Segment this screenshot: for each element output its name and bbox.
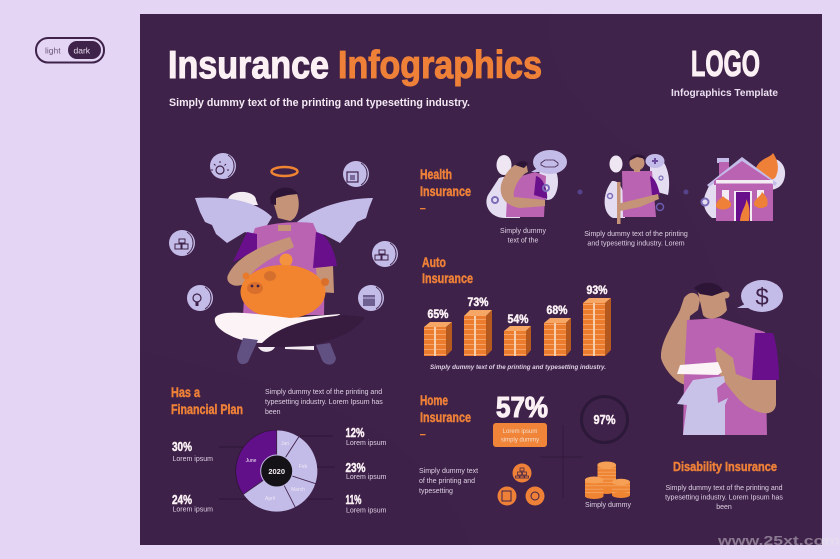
pie chart: June	[246, 458, 257, 464]
bar 65%	[424, 307, 452, 356]
stat 11%	[307, 493, 387, 514]
right sleeve	[313, 232, 337, 268]
caption 1: Simply dummy	[500, 228, 546, 235]
description: typesetting industry. Lorem Ipsum has	[265, 399, 383, 406]
light/dark toggle: light	[45, 46, 61, 56]
crossed white legs	[215, 313, 340, 343]
left sleeve	[233, 232, 257, 262]
title	[168, 44, 542, 87]
head	[694, 283, 730, 319]
stat 24%: 24%	[172, 493, 192, 507]
icon: coin	[526, 486, 544, 506]
pie chart: March	[291, 487, 305, 493]
pie chart: Feb	[299, 464, 308, 470]
figure 3: burning house	[702, 153, 785, 221]
heading: Insurance	[422, 271, 473, 286]
right arm	[316, 266, 334, 293]
stat 24%: Lorem ipsum	[172, 506, 213, 514]
connector dot	[684, 190, 688, 194]
heading: Health	[420, 167, 452, 182]
pie chart: 2020	[268, 467, 285, 476]
pie chart	[236, 430, 318, 512]
coin	[280, 254, 292, 266]
heading: Home	[420, 393, 448, 408]
caption 2	[584, 231, 688, 248]
bar 68%	[544, 303, 571, 356]
right foot	[316, 343, 336, 365]
piggy bank	[240, 265, 329, 319]
logo	[671, 43, 778, 99]
title: Infographics	[338, 44, 542, 87]
subtitle: Simply dummy text of the printing and typesetting industry.	[169, 97, 470, 109]
description: Simply dummy text of the printing and	[265, 389, 382, 396]
pie chart: Jan	[281, 441, 289, 447]
orange callout: Lorem ipsum	[503, 429, 537, 435]
shirt	[243, 222, 325, 315]
stat 12%: Lorem ipsum	[346, 440, 387, 447]
stat 24%	[172, 493, 247, 514]
stat 30%: Lorem ipsum	[172, 456, 213, 463]
bar 93%: 93%	[586, 283, 608, 297]
bar 65%: 65%	[428, 307, 449, 321]
heading: Has a	[171, 385, 200, 400]
ring stat 97%: 97%	[594, 412, 616, 427]
paper roll	[677, 362, 722, 375]
heading: Insurance	[420, 410, 471, 425]
logo: Infographics Template	[671, 87, 778, 99]
description: typesetting industry. Lorem Ipsum has	[665, 494, 783, 502]
bar 73%: 73%	[468, 295, 489, 309]
orbit icon: safe	[343, 161, 369, 187]
shirt	[683, 318, 767, 435]
figure 2	[605, 154, 669, 224]
sleeve	[752, 333, 779, 380]
description	[419, 468, 478, 495]
bar 54%	[504, 312, 531, 356]
left arm	[227, 237, 294, 286]
heading: Auto	[422, 255, 446, 270]
big stat 57%: 57%	[496, 392, 548, 424]
heading	[422, 255, 473, 286]
stat 11%: 11%	[346, 493, 362, 507]
bar 54%: 54%	[508, 312, 529, 326]
orbit icon: gold bars left	[169, 230, 195, 256]
orbit icon: calendar	[358, 285, 384, 311]
figure 1	[486, 150, 567, 218]
section: financial plan	[171, 385, 387, 514]
stat 12%	[300, 426, 387, 447]
title: Insurance	[168, 44, 329, 87]
left arm	[661, 293, 700, 385]
halo	[272, 167, 298, 176]
caption 1: text of the	[508, 238, 538, 244]
description: typesetting	[419, 488, 453, 495]
bar chart	[424, 283, 611, 356]
heading	[420, 393, 471, 435]
light/dark toggle: dark	[74, 46, 91, 56]
illustration: angel with piggy bank	[169, 153, 398, 365]
chart caption: Simply dummy text of the printing and typesetting industry.	[430, 364, 606, 371]
right arm	[715, 347, 776, 413]
description: Simply dummy text	[419, 468, 478, 475]
right wing	[297, 198, 373, 243]
description: of the printing and	[419, 478, 475, 485]
pie chart: April	[265, 496, 275, 502]
orange callout: simply dummy	[501, 438, 539, 444]
stat 23%: Lorem ipsum	[346, 474, 387, 481]
bar 73%	[464, 295, 492, 356]
light/dark toggle	[36, 38, 104, 62]
speech bubble: $	[755, 284, 769, 311]
bar 68%: 68%	[546, 303, 568, 317]
caption 2: Simply dummy text of the printing	[584, 231, 688, 238]
icon: safe	[498, 486, 516, 506]
dark leg	[262, 315, 365, 347]
icon: coin stacks	[585, 462, 630, 499]
orbit icon: gold bars right	[372, 241, 398, 267]
stat 23%: 23%	[346, 461, 366, 475]
watermark: www.25xt.com	[717, 533, 840, 548]
section: health insurance	[420, 150, 785, 248]
description	[665, 485, 783, 511]
speech bubble	[737, 280, 783, 312]
heading: Insurance	[420, 184, 471, 199]
stat 11%: Lorem ipsum	[346, 508, 387, 514]
section: auto insurance	[422, 255, 611, 371]
description: been	[716, 504, 732, 511]
heading: Disability Insurance	[673, 459, 777, 474]
caption 1	[500, 228, 546, 244]
heading: Financial Plan	[171, 402, 243, 417]
left wing	[195, 198, 272, 243]
description: Simply dummy text of the printing and	[665, 485, 783, 492]
white foot strip	[258, 346, 314, 352]
stat 30%: 30%	[172, 440, 192, 454]
stat 30%	[172, 440, 243, 463]
paper	[677, 376, 728, 435]
stat 23%	[317, 461, 387, 481]
bar 93%	[583, 283, 611, 356]
description: been	[265, 409, 281, 416]
left foot	[237, 338, 258, 364]
orbit icon: light bulb	[187, 285, 213, 311]
heading	[420, 167, 471, 209]
main dark panel	[140, 14, 822, 545]
section: home insurance	[419, 392, 631, 509]
orbit icon: sun	[210, 153, 236, 179]
logo: LOGO	[691, 43, 760, 84]
heading	[171, 385, 243, 417]
head	[270, 188, 299, 231]
stat 12%: 12%	[346, 426, 364, 440]
section: disability insurance	[661, 280, 783, 511]
caption 2: and typesetting industry. Lorem	[587, 240, 685, 248]
illustration: person with bill	[661, 280, 783, 435]
orange callout	[493, 423, 547, 447]
icon: gold bars	[512, 464, 532, 482]
coin caption: Simply dummy	[585, 502, 631, 509]
connector dot	[578, 190, 582, 194]
ring stat 97%	[582, 396, 628, 442]
cloud	[226, 192, 258, 205]
description	[265, 389, 383, 416]
